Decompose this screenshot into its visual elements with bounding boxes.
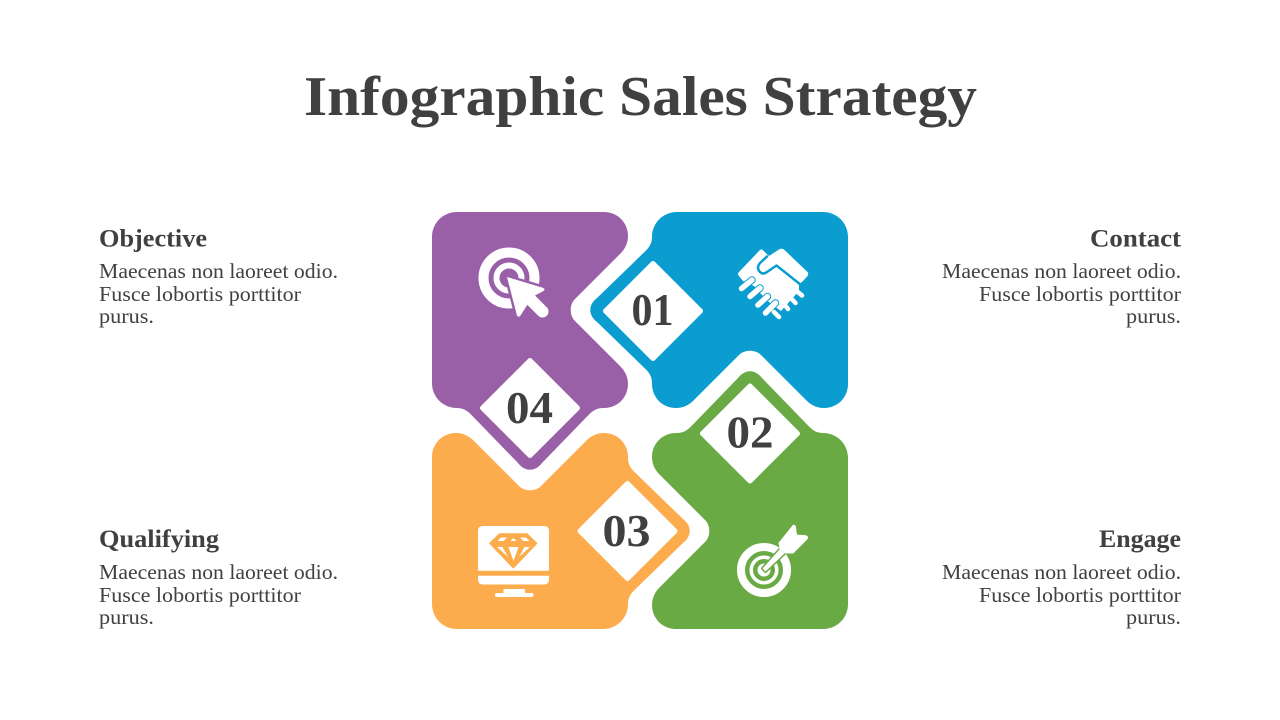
number badge 04: 04 xyxy=(506,382,553,433)
panel: contact text xyxy=(942,226,1182,328)
text block: objective description: Fusce lobortis porttitor xyxy=(99,282,301,306)
number badge 02 xyxy=(702,386,798,481)
icon: cursor clicking target xyxy=(484,252,549,318)
number badge 01: 01 xyxy=(632,284,674,335)
text block: qualifying description: purus. xyxy=(99,605,154,629)
heading: engage: Engage xyxy=(1099,526,1181,553)
heading: qualifying: Qualifying xyxy=(99,526,220,553)
title: Infographic Sales Strategy xyxy=(304,66,977,128)
panel: engage text xyxy=(942,526,1181,629)
panel: qualifying text xyxy=(99,526,338,629)
heading: objective: Objective xyxy=(99,226,207,252)
number badge 01 xyxy=(606,264,700,358)
text block: qualifying description: Maecenas non laoreet odio. xyxy=(99,560,338,584)
puzzle piece: purple 04 xyxy=(432,212,628,470)
text block: engage description xyxy=(942,560,1181,629)
number badge 03: 03 xyxy=(602,505,650,556)
puzzle piece: blue 01 xyxy=(590,212,848,408)
icon: target with arrow xyxy=(741,525,808,593)
text block: objective description: Maecenas non laoreet odio. xyxy=(99,259,338,283)
number badge 02: 02 xyxy=(726,406,774,458)
text block: contact description: purus. xyxy=(1126,304,1181,328)
text block: contact description: Maecenas non laoreet odio. xyxy=(942,259,1181,283)
text block: qualifying description xyxy=(99,560,338,629)
icon: monitor with gem xyxy=(478,526,549,597)
puzzle piece: green 02 xyxy=(652,371,848,629)
text block: objective description xyxy=(99,259,338,328)
panel: objective text xyxy=(99,226,338,328)
text block: engage description: Fusce lobortis porttitor xyxy=(979,583,1181,607)
puzzle piece: orange 03 xyxy=(432,433,690,629)
icon: handshake xyxy=(738,249,808,317)
number badge 03 xyxy=(580,484,675,578)
heading: contact: Contact xyxy=(1090,226,1182,252)
text block: objective description: purus. xyxy=(99,304,154,328)
text block: engage description: Maecenas non laoreet odio. xyxy=(942,560,1181,584)
text block: engage description: purus. xyxy=(1126,605,1181,629)
text block: qualifying description: Fusce lobortis porttitor xyxy=(99,583,301,607)
text block: contact description: Fusce lobortis porttitor xyxy=(979,282,1181,306)
text block: contact description xyxy=(942,259,1181,328)
number badge 04 xyxy=(482,360,578,456)
